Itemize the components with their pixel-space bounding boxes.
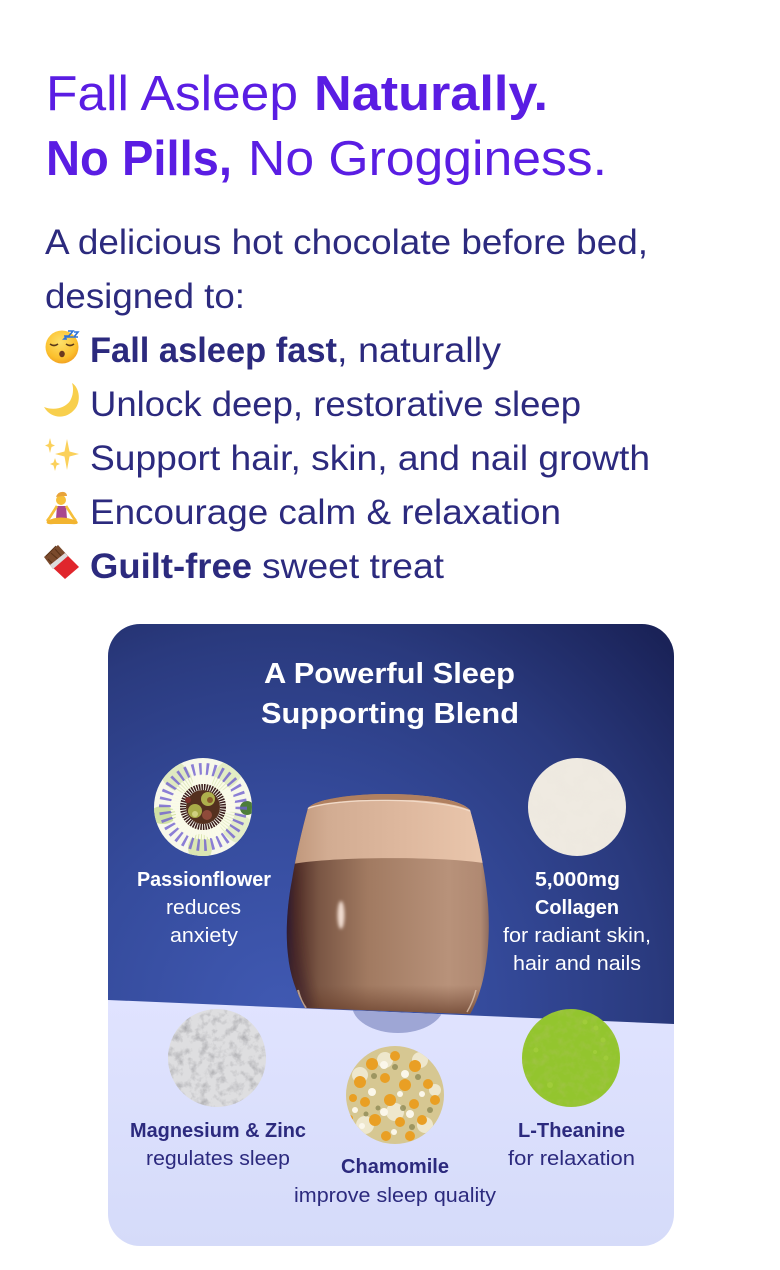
card heading: Supporting Blend (261, 698, 519, 730)
title (46, 67, 607, 186)
title: No Grogginess. (248, 132, 607, 186)
label: collagen: 5,000mg (535, 869, 620, 891)
list item: fall asleep (90, 331, 502, 370)
label: magnesium and zinc: regulates sleep (146, 1148, 290, 1170)
label: chamomile: Chamomile (341, 1156, 449, 1178)
card heading (261, 658, 519, 730)
image: glass of hot chocolate (280, 792, 490, 1017)
list item: guilt-free: Guilt-free (90, 547, 252, 586)
list item: calm: Encourage calm & relaxation (90, 493, 561, 532)
label: L-theanine (508, 1122, 634, 1165)
intro text: A delicious hot chocolate before bed, (45, 223, 648, 262)
label: collagen: for radiant skin, (503, 925, 651, 947)
image: magnesium and zinc powder (168, 1009, 266, 1107)
label: collagen (503, 869, 651, 975)
list item: fall asleep: , naturally (337, 331, 502, 370)
label: L-theanine: L-Theanine (518, 1120, 625, 1142)
intro text: designed to: (45, 277, 245, 316)
panel background: dark (108, 624, 674, 1044)
icon: meditating person (47, 492, 78, 524)
icon: crescent moon (44, 383, 79, 417)
label: collagen: Collagen (535, 897, 619, 919)
intro text (45, 223, 648, 316)
label: chamomile (294, 1156, 496, 1207)
glass shadow (353, 1010, 442, 1033)
label: magnesium and zinc: Magnesium & Zinc (130, 1120, 306, 1142)
title: Naturally. (314, 67, 548, 121)
label: passionflower (137, 869, 271, 947)
list item: fall asleep: Fall asleep fast (90, 331, 337, 370)
label: passionflower: anxiety (170, 925, 238, 947)
list item: deep sleep: Unlock deep, restorative sleep (90, 385, 581, 424)
label: passionflower: Passionflower (137, 869, 271, 891)
title: No Pills, (46, 132, 232, 186)
icon: sparkles (45, 438, 79, 471)
list item: guilt-free: sweet treat (262, 547, 444, 586)
image: collagen powder (528, 758, 626, 856)
card heading: A Powerful Sleep (264, 658, 515, 690)
icon: chocolate bar (44, 545, 79, 579)
image: passionflower (154, 758, 252, 856)
list item: guilt-free (90, 547, 444, 586)
panel background: light (108, 1000, 674, 1246)
title: Fall Asleep (46, 67, 298, 121)
label: passionflower: reduces (166, 897, 241, 919)
list item: hair skin nails: Support hair, skin, and nail growth (90, 439, 650, 478)
label: chamomile: improve sleep quality (294, 1185, 496, 1207)
label: L-theanine: for relaxation (508, 1148, 635, 1170)
label: magnesium and zinc (130, 1120, 306, 1170)
image: chamomile (346, 1046, 444, 1144)
panel: sleep blend card (108, 624, 674, 1246)
label: collagen: hair and nails (513, 953, 641, 975)
icon: sleeping face (46, 330, 78, 364)
image: L-theanine powder (522, 1009, 620, 1107)
